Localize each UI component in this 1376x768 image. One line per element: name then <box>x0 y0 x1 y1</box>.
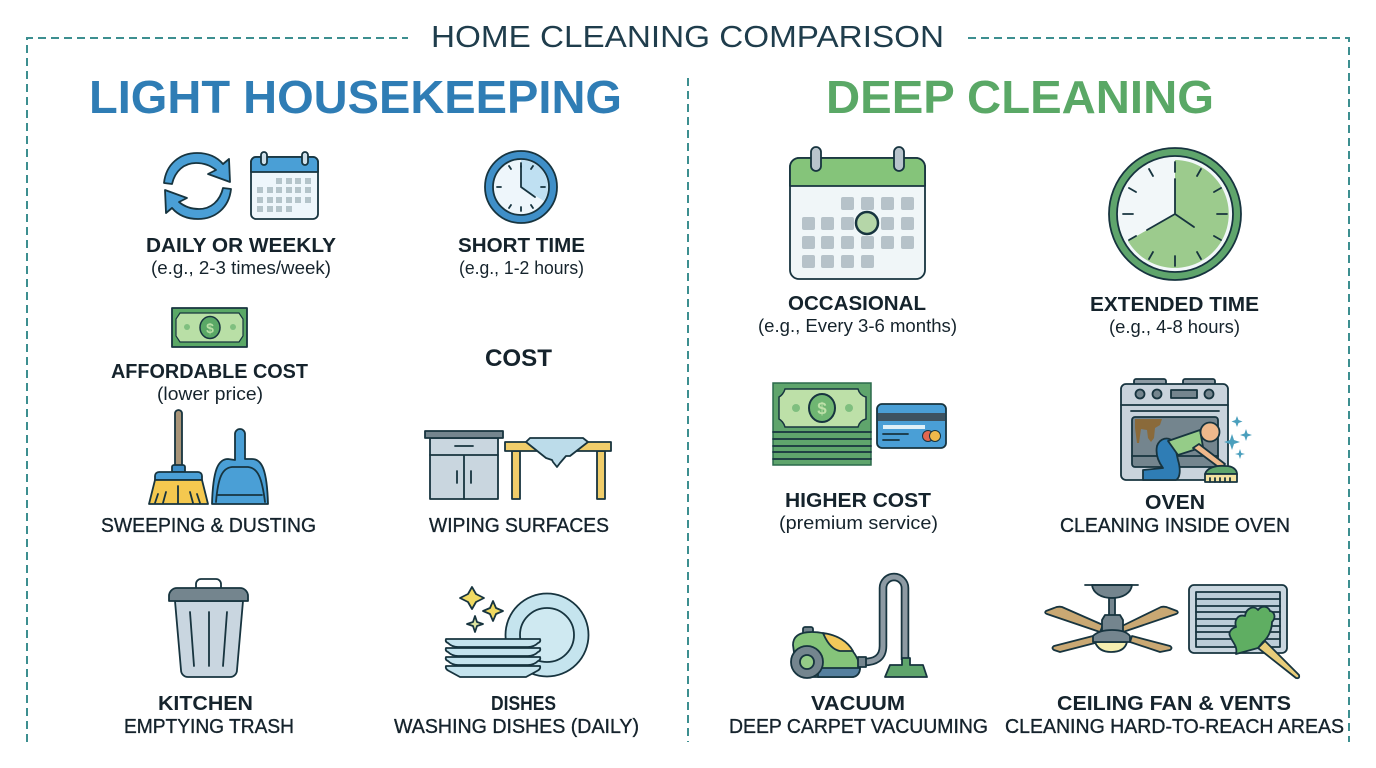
label: sweeping and dusting: SWEEPING & DUSTING <box>101 515 316 537</box>
item: kitchen <box>124 579 294 738</box>
note: short time: (e.g., 1-2 hours) <box>459 258 584 278</box>
note: kitchen: EMPTYING TRASH <box>124 716 294 738</box>
panel: light housekeeping <box>101 151 639 738</box>
note: daily or weekly: (e.g., 2-3 times/week) <box>151 258 331 278</box>
note: extended time: (e.g., 4-8 hours) <box>1109 317 1240 337</box>
icon: vent with duster <box>1189 585 1299 678</box>
note: affordable cost: (lower price) <box>157 384 263 404</box>
icon: money stack: $ <box>817 399 827 418</box>
icon: trash can <box>169 579 248 677</box>
label: cost: COST <box>485 345 552 372</box>
icon: ceiling fan <box>1045 585 1178 652</box>
icon: broom <box>149 410 208 504</box>
item: vacuum <box>729 577 988 738</box>
title: HOME CLEANING COMPARISON <box>431 19 944 54</box>
icon: blue calendar <box>251 152 318 219</box>
item: wiping surfaces <box>425 431 611 537</box>
icon: vacuum cleaner <box>791 577 927 678</box>
item: short time <box>458 151 585 278</box>
label: higher cost: HIGHER COST <box>785 490 931 512</box>
icon: oven with cleaner <box>1121 379 1252 482</box>
note: higher cost: (premium service) <box>779 513 938 533</box>
item: sweeping and dusting <box>101 410 316 537</box>
note: vacuum: DEEP CARPET VACUUMING <box>729 716 988 738</box>
note: ceiling fan and vents: CLEANING HARD-TO-REACH AREAS <box>1005 716 1344 738</box>
item: extended time <box>1090 148 1259 337</box>
heading: light housekeeping: LIGHT HOUSEKEEPING <box>89 71 622 123</box>
item: ceiling fan and vents <box>1005 585 1344 738</box>
note: occasional: (e.g., Every 3-6 months) <box>758 316 957 336</box>
item: daily or weekly <box>146 152 337 278</box>
note: oven: CLEANING INSIDE OVEN <box>1060 515 1290 537</box>
note: dishes: WASHING DISHES (DAILY) <box>394 716 639 738</box>
icon: banknote: $ <box>206 320 214 336</box>
icon: cabinet <box>425 431 503 499</box>
label: occasional: OCCASIONAL <box>788 293 926 315</box>
item: occasional <box>758 147 957 336</box>
label: extended time: EXTENDED TIME <box>1090 294 1259 316</box>
icon: green clock <box>1109 148 1241 280</box>
item: affordable cost <box>111 308 308 404</box>
icon: table with cloth <box>505 438 611 499</box>
label: dishes: DISHES <box>491 693 556 715</box>
label: kitchen: KITCHEN <box>158 693 253 715</box>
label: ceiling fan and vents: CEILING FAN & VENTS <box>1057 693 1291 715</box>
icon: money stack <box>773 383 871 465</box>
icon: dishes <box>446 587 588 677</box>
label: short time: SHORT TIME <box>458 235 585 257</box>
label: oven: OVEN <box>1145 492 1205 514</box>
item: oven <box>1060 379 1290 537</box>
icon: banknote <box>172 308 247 347</box>
label: vacuum: VACUUM <box>811 693 905 715</box>
item: dishes <box>394 587 639 738</box>
icon: credit card <box>877 404 946 448</box>
panel: deep cleaning <box>729 147 1344 738</box>
icon: refresh arrows <box>164 153 231 219</box>
heading: deep cleaning: DEEP CLEANING <box>826 71 1214 123</box>
label: daily or weekly: DAILY OR WEEKLY <box>146 235 337 257</box>
icon: dustpan <box>212 429 268 504</box>
icon: green calendar <box>790 147 925 279</box>
label: affordable cost: AFFORDABLE COST <box>111 361 308 383</box>
label: wiping surfaces: WIPING SURFACES <box>429 515 609 537</box>
item: higher cost <box>773 383 946 533</box>
icon: blue clock <box>485 151 557 223</box>
